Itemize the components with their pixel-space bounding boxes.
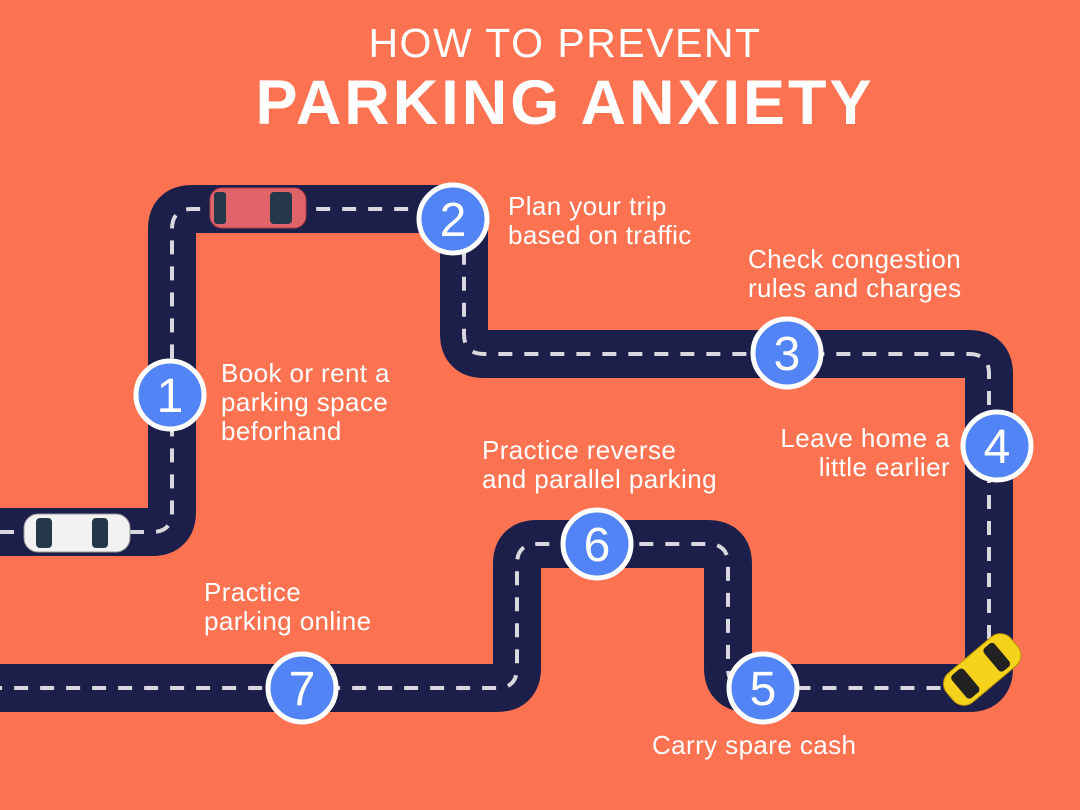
text 4: little earlier: [819, 452, 950, 482]
text 4: Leave home a: [780, 423, 950, 453]
car: white: [24, 514, 130, 552]
markers: 5: [750, 663, 776, 716]
text 3: [748, 244, 961, 303]
text 1: [221, 358, 390, 446]
title: PARKING ANXIETY: [255, 68, 875, 138]
markers: [136, 185, 1031, 722]
markers: 3: [774, 328, 800, 381]
text 3: rules and charges: [748, 273, 961, 303]
markers: 1: [157, 370, 183, 423]
text 1: parking space: [221, 387, 388, 417]
markers: 4: [984, 421, 1010, 474]
text 2: [508, 191, 692, 250]
text 6: [482, 435, 717, 494]
text 7: [204, 577, 372, 636]
text 6: and parallel parking: [482, 464, 717, 494]
car: red: [210, 188, 306, 228]
title: HOW TO PREVENT: [368, 20, 762, 66]
text 5: Carry spare cash: [652, 730, 856, 760]
text 7: Practice: [204, 577, 301, 607]
car: yellow: [938, 628, 1027, 711]
markers: 6: [584, 519, 610, 572]
text 1: Book or rent a: [221, 358, 390, 388]
text 2: based on traffic: [508, 220, 692, 250]
text 1: beforhand: [221, 416, 342, 446]
markers: 2: [440, 194, 466, 247]
text 4: [780, 423, 950, 482]
text 3: Check congestion: [748, 244, 961, 274]
text 6: Practice reverse: [482, 435, 676, 465]
text 2: Plan your trip: [508, 191, 667, 221]
text 7: parking online: [204, 606, 372, 636]
title: [255, 20, 875, 138]
markers: 7: [289, 663, 315, 716]
